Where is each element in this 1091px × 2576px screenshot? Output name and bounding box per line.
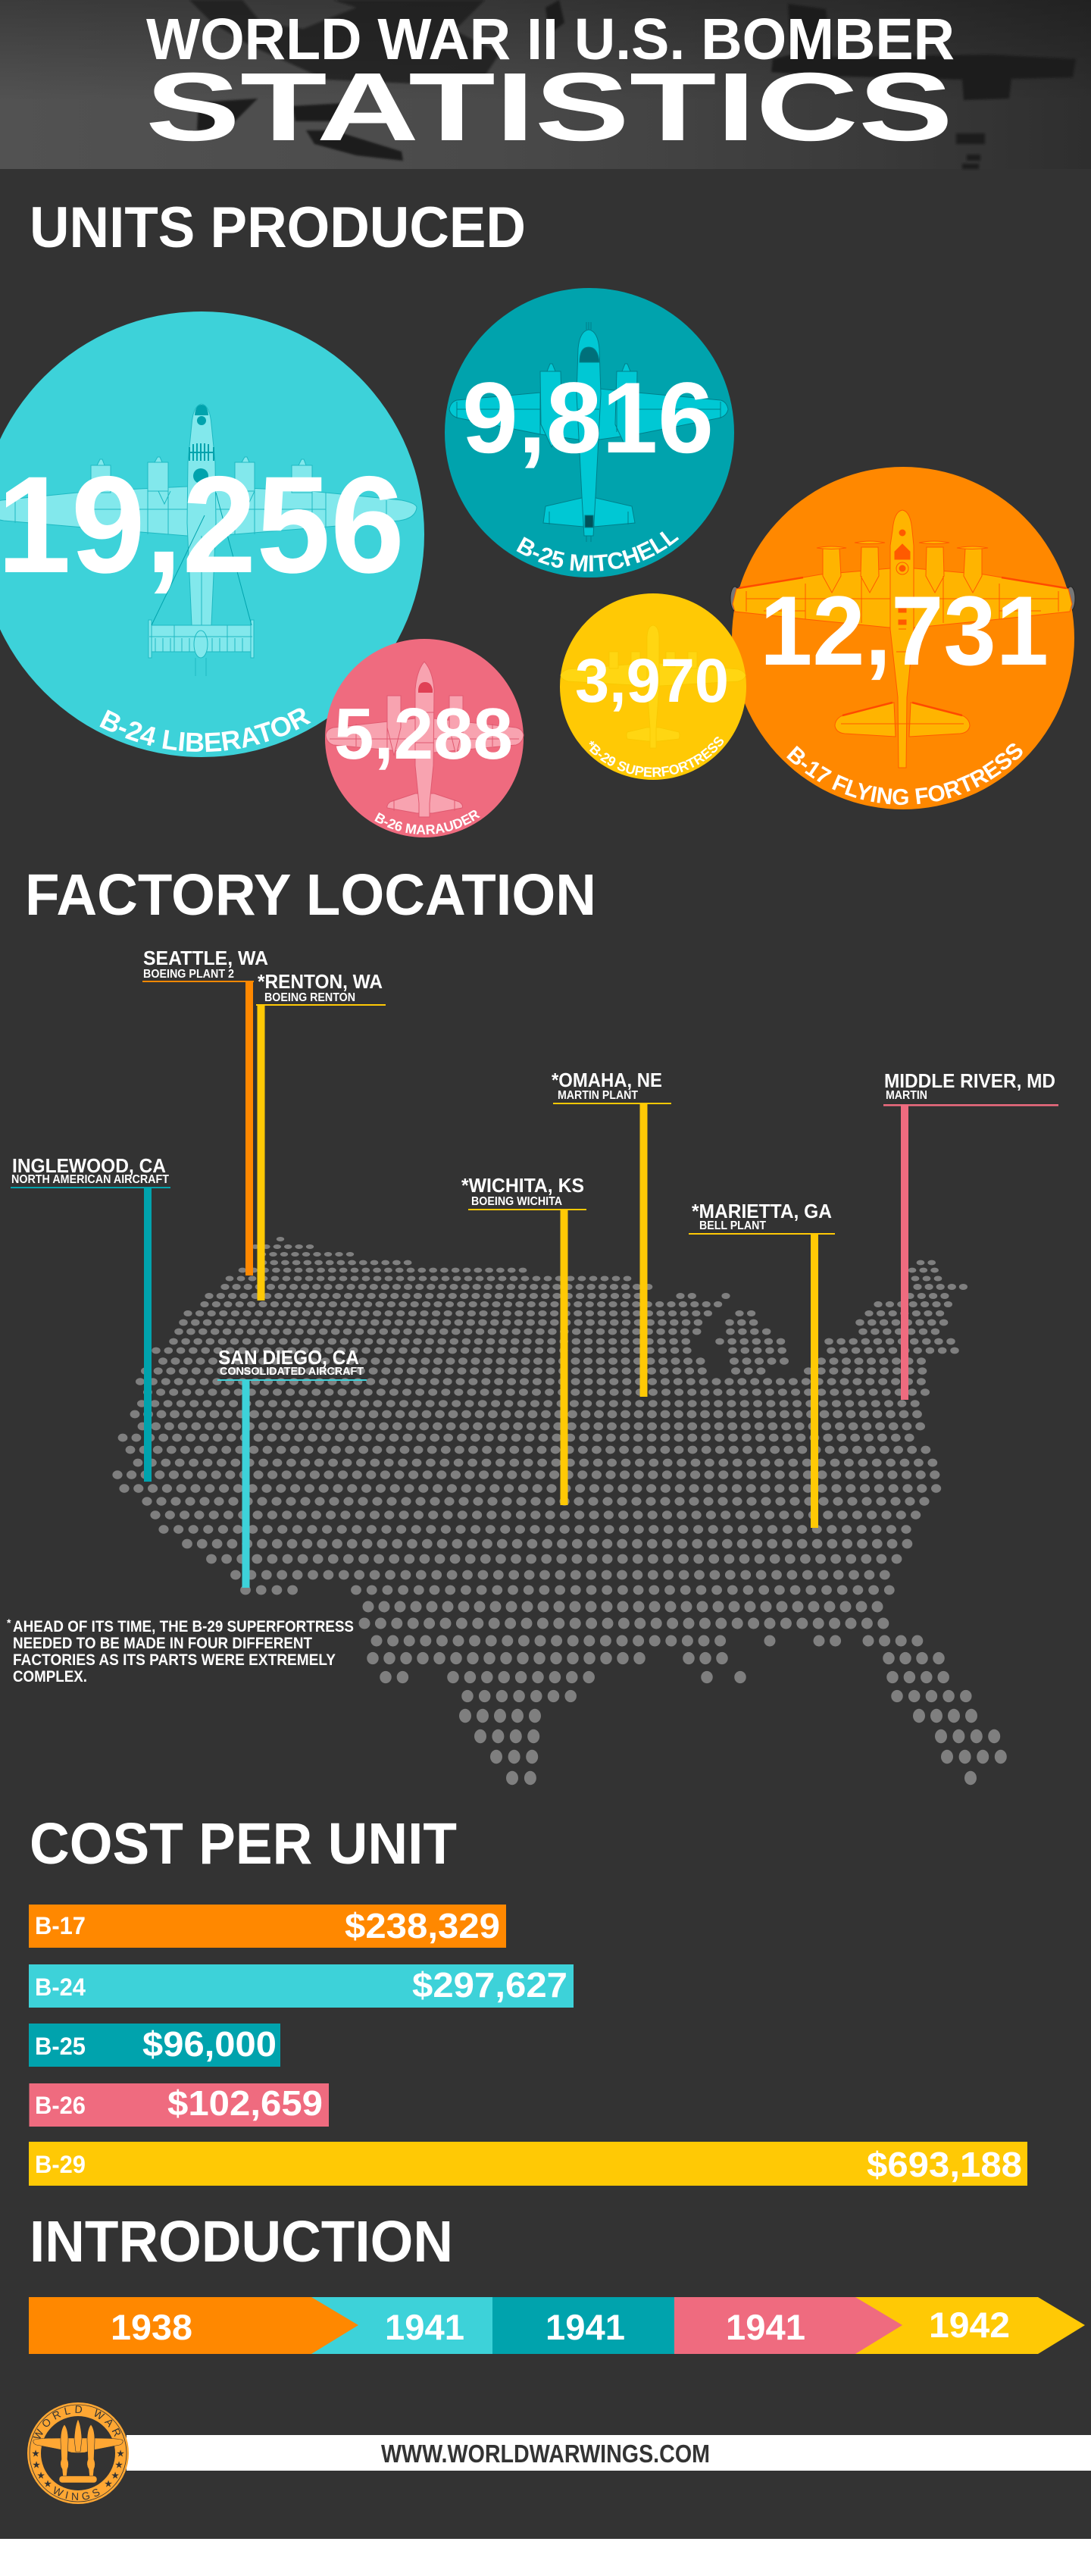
segment: B-25 1941: 1941 bbox=[546, 2307, 625, 2347]
factory marker: San Diego: SAN DIEGO, CA bbox=[218, 1346, 359, 1369]
arrow: B-26 1941: 1941 bbox=[726, 2307, 805, 2347]
footnote: NEEDED TO BE MADE IN FOUR DIFFERENT bbox=[13, 1635, 312, 1652]
badge stars: ★ bbox=[32, 2449, 39, 2459]
heading: units produced: UNITS PRODUCED bbox=[30, 196, 526, 260]
factory marker: Renton bbox=[256, 970, 386, 1301]
icon: B-25 plane bbox=[449, 322, 728, 542]
bar: B-25: B-25 bbox=[35, 2033, 86, 2060]
bubble: B-17 Flying Fortress bbox=[730, 467, 1076, 809]
bar: B-26: B-26 bbox=[35, 2092, 86, 2119]
arrow: B-17 1938: 1938 bbox=[111, 2307, 192, 2347]
timeline arrows: introduction years bbox=[29, 2297, 1085, 2354]
header photo band with bomber silhouettes bbox=[0, 0, 1091, 169]
factory marker: Renton: BOEING RENTON bbox=[264, 991, 355, 1004]
badge stars: ★ bbox=[115, 2461, 123, 2470]
factory marker: Wichita: *WICHITA, KS bbox=[461, 1174, 584, 1197]
bar: B-24: B-24 bbox=[35, 1973, 86, 2001]
heading: factory location: FACTORY LOCATION bbox=[25, 862, 596, 928]
badge stars bbox=[32, 2449, 124, 2489]
factory marker: Inglewood: INGLEWOOD, CA bbox=[12, 1154, 166, 1177]
heading: introduction: INTRODUCTION bbox=[30, 2209, 453, 2274]
factory marker: San Diego: CONSOLIDATED AIRCRAFT bbox=[220, 1365, 364, 1378]
factory marker: Omaha: MARTIN PLANT bbox=[558, 1089, 638, 1102]
icon: B-17 plane bbox=[733, 510, 1072, 768]
dot map of the United States bbox=[117, 1239, 1002, 1778]
badge stars: ★ bbox=[117, 2449, 124, 2459]
factory marker: Renton: *RENTON, WA bbox=[258, 970, 383, 993]
factory marker: Middle River bbox=[883, 1069, 1058, 1400]
badge stars: ★ bbox=[37, 2471, 45, 2481]
badge stars: ★ bbox=[111, 2471, 119, 2481]
segment: B-24 1941 bbox=[311, 2297, 492, 2354]
footer bar with website bbox=[127, 2435, 1091, 2471]
bar: B-26: $102,659 bbox=[167, 2083, 323, 2123]
arrow: B-26 1941 bbox=[674, 2297, 902, 2354]
badge plane bbox=[33, 2419, 123, 2483]
number: 9,816 bbox=[462, 362, 714, 474]
footnote: FACTORIES AS ITS PARTS WERE EXTREMELY bbox=[13, 1651, 336, 1669]
factory marker: San Diego bbox=[217, 1346, 367, 1588]
curved label: *B-29 SUPERFORTRESS bbox=[589, 737, 724, 778]
bar: B-17 bbox=[29, 1905, 506, 1948]
factory marker: Marietta bbox=[689, 1200, 835, 1528]
icon: B-26 plane bbox=[326, 662, 524, 817]
bar: B-25 bbox=[29, 2024, 280, 2067]
heading: cost per unit: COST PER UNIT bbox=[30, 1811, 457, 1876]
number: 5,288 bbox=[334, 693, 513, 775]
bubble: B-24 Liberator bbox=[0, 311, 424, 757]
curved label: B-26 MARAUDER bbox=[374, 810, 480, 835]
bar: B-24 bbox=[29, 1964, 574, 2008]
bubble: B-26 Marauder bbox=[325, 639, 524, 837]
bubble: B-29 Superfortress bbox=[560, 593, 746, 780]
segment: B-24 1941: 1941 bbox=[385, 2307, 464, 2347]
number: 12,731 bbox=[760, 575, 1049, 686]
footnote: COMPLEX. bbox=[13, 1668, 87, 1686]
title: STATISTICS bbox=[145, 53, 953, 161]
footer bar with website: WWW.WORLDWARWINGS.COM bbox=[381, 2440, 710, 2468]
title: WORLD WAR II U.S. BOMBER bbox=[146, 7, 955, 72]
wing tip caps bbox=[730, 587, 1075, 611]
number: 3,970 bbox=[575, 646, 729, 715]
factory marker: Marietta: BELL PLANT bbox=[699, 1219, 766, 1232]
curved label: B-17 FLYING FORTRESS bbox=[786, 743, 1023, 805]
factory marker: Middle River: MARTIN bbox=[886, 1089, 927, 1102]
badge text: WORLD WAR bbox=[33, 2405, 120, 2439]
arrow: B-29 1942: 1942 bbox=[929, 2305, 1010, 2345]
factory marker: Wichita: BOEING WICHITA bbox=[471, 1195, 562, 1208]
footnote: AHEAD OF ITS TIME, THE B-29 SUPERFORTRESS bbox=[13, 1618, 354, 1635]
badge stars: ★ bbox=[44, 2480, 52, 2489]
badge stars: ★ bbox=[105, 2480, 112, 2489]
factory marker: Seattle: SEATTLE, WA bbox=[143, 947, 268, 969]
bar: B-24: $297,627 bbox=[412, 1965, 567, 2005]
icon: B-29 plane bbox=[561, 625, 746, 748]
logo: World War Wings badge bbox=[27, 2402, 129, 2504]
factory marker: Inglewood bbox=[11, 1154, 170, 1482]
segment: B-25 1941 bbox=[492, 2297, 674, 2354]
footnote bbox=[7, 1617, 354, 1686]
bar: B-29 bbox=[29, 2142, 1027, 2186]
bar: B-25: $96,000 bbox=[142, 2024, 277, 2064]
curved label: B-24 LIBERATOR bbox=[99, 708, 311, 752]
factory marker: Inglewood: NORTH AMERICAN AIRCRAFT bbox=[11, 1173, 169, 1186]
footnote: * bbox=[7, 1617, 11, 1629]
factory marker: Marietta: *MARIETTA, GA bbox=[692, 1200, 832, 1222]
arrow: B-17 1938 bbox=[29, 2297, 358, 2354]
factory marker: Omaha bbox=[552, 1069, 671, 1397]
factory marker: Wichita bbox=[461, 1174, 586, 1505]
bar: B-17: $238,329 bbox=[345, 1906, 500, 1945]
arrow: B-29 1942 bbox=[855, 2297, 1085, 2354]
factory marker: Middle River: MIDDLE RIVER, MD bbox=[884, 1069, 1055, 1092]
bar: B-29: B-29 bbox=[35, 2151, 86, 2178]
logo: World War Wings badge: WINGS bbox=[54, 2486, 100, 2500]
badge stars: ★ bbox=[33, 2461, 40, 2470]
factory marker: Seattle bbox=[142, 947, 268, 1275]
curved label: B-25 MITCHELL bbox=[517, 531, 679, 571]
bar: B-17: B-17 bbox=[35, 1912, 86, 1939]
bubble: B-25 Mitchell bbox=[445, 288, 734, 577]
bar chart: cost per unit bbox=[29, 1905, 1027, 2186]
number: 19,256 bbox=[0, 447, 405, 602]
factory marker: Omaha: *OMAHA, NE bbox=[552, 1069, 662, 1091]
bar: B-29: $693,188 bbox=[867, 2145, 1022, 2184]
title bbox=[145, 7, 955, 161]
icon: B-24 plane bbox=[0, 404, 417, 676]
bar: B-26 bbox=[29, 2083, 329, 2127]
factory marker: Seattle: BOEING PLANT 2 bbox=[143, 968, 234, 981]
